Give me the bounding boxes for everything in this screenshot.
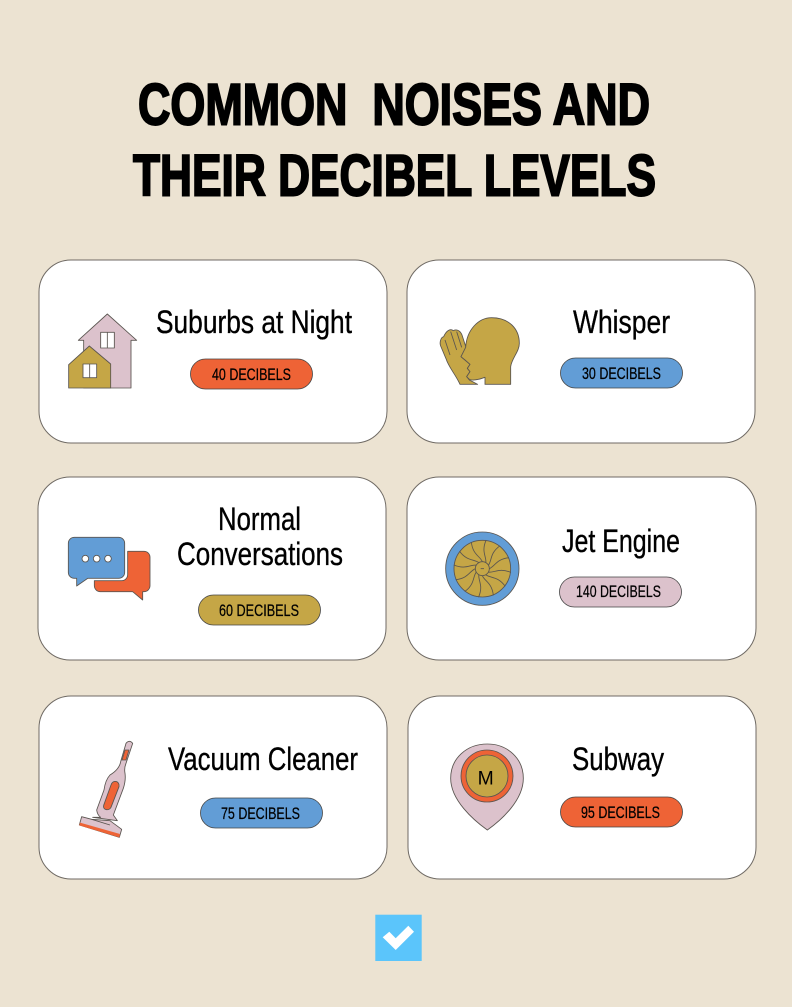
heading: normal conversations: Conversations	[177, 536, 343, 572]
badge: 30 decibels	[560, 358, 682, 388]
icon: speech bubbles	[68, 537, 150, 600]
icon: subway map pin: M	[478, 768, 494, 789]
icon: jet engine turbine	[446, 532, 519, 605]
panel: vacuum cleaner	[39, 696, 387, 879]
badge: 60 decibels	[198, 595, 320, 625]
panel: subway	[408, 696, 756, 879]
heading: subway: Subway	[572, 741, 664, 777]
badge: 95 decibels	[560, 797, 682, 827]
badge: 75 decibels	[200, 798, 322, 828]
icon: check mark logo	[375, 915, 422, 961]
heading: jet engine: Jet Engine	[562, 523, 680, 559]
badge: 30 decibels: 30 DECIBELS	[582, 364, 661, 383]
heading: vacuum cleaner: Vacuum Cleaner	[168, 741, 358, 777]
heading: suburbs at night: Suburbs at Night	[156, 304, 352, 340]
panel: whisper	[407, 260, 755, 443]
panel: normal conversations	[38, 477, 386, 660]
badge: 140 decibels	[560, 577, 682, 607]
badge: 75 decibels: 75 DECIBELS	[221, 804, 300, 823]
title: COMMON NOISES AND	[138, 72, 650, 138]
icon: whispering head	[440, 318, 519, 384]
panel: jet engine	[407, 477, 756, 660]
icon: subway map pin	[451, 744, 523, 830]
heading: whisper: Whisper	[573, 304, 670, 340]
badge: 95 decibels: 95 DECIBELS	[581, 803, 660, 822]
icon: vacuum cleaner	[79, 741, 133, 837]
title	[133, 72, 656, 208]
badge: 60 decibels: 60 DECIBELS	[219, 601, 299, 620]
panel: suburbs at night	[39, 260, 387, 443]
badge: 40 decibels	[190, 359, 312, 389]
heading: normal conversations	[177, 501, 343, 572]
badge: 40 decibels: 40 DECIBELS	[212, 365, 291, 384]
icon: houses	[69, 314, 137, 388]
heading: normal conversations: Normal	[218, 501, 301, 537]
badge: 140 decibels: 140 DECIBELS	[576, 582, 661, 601]
